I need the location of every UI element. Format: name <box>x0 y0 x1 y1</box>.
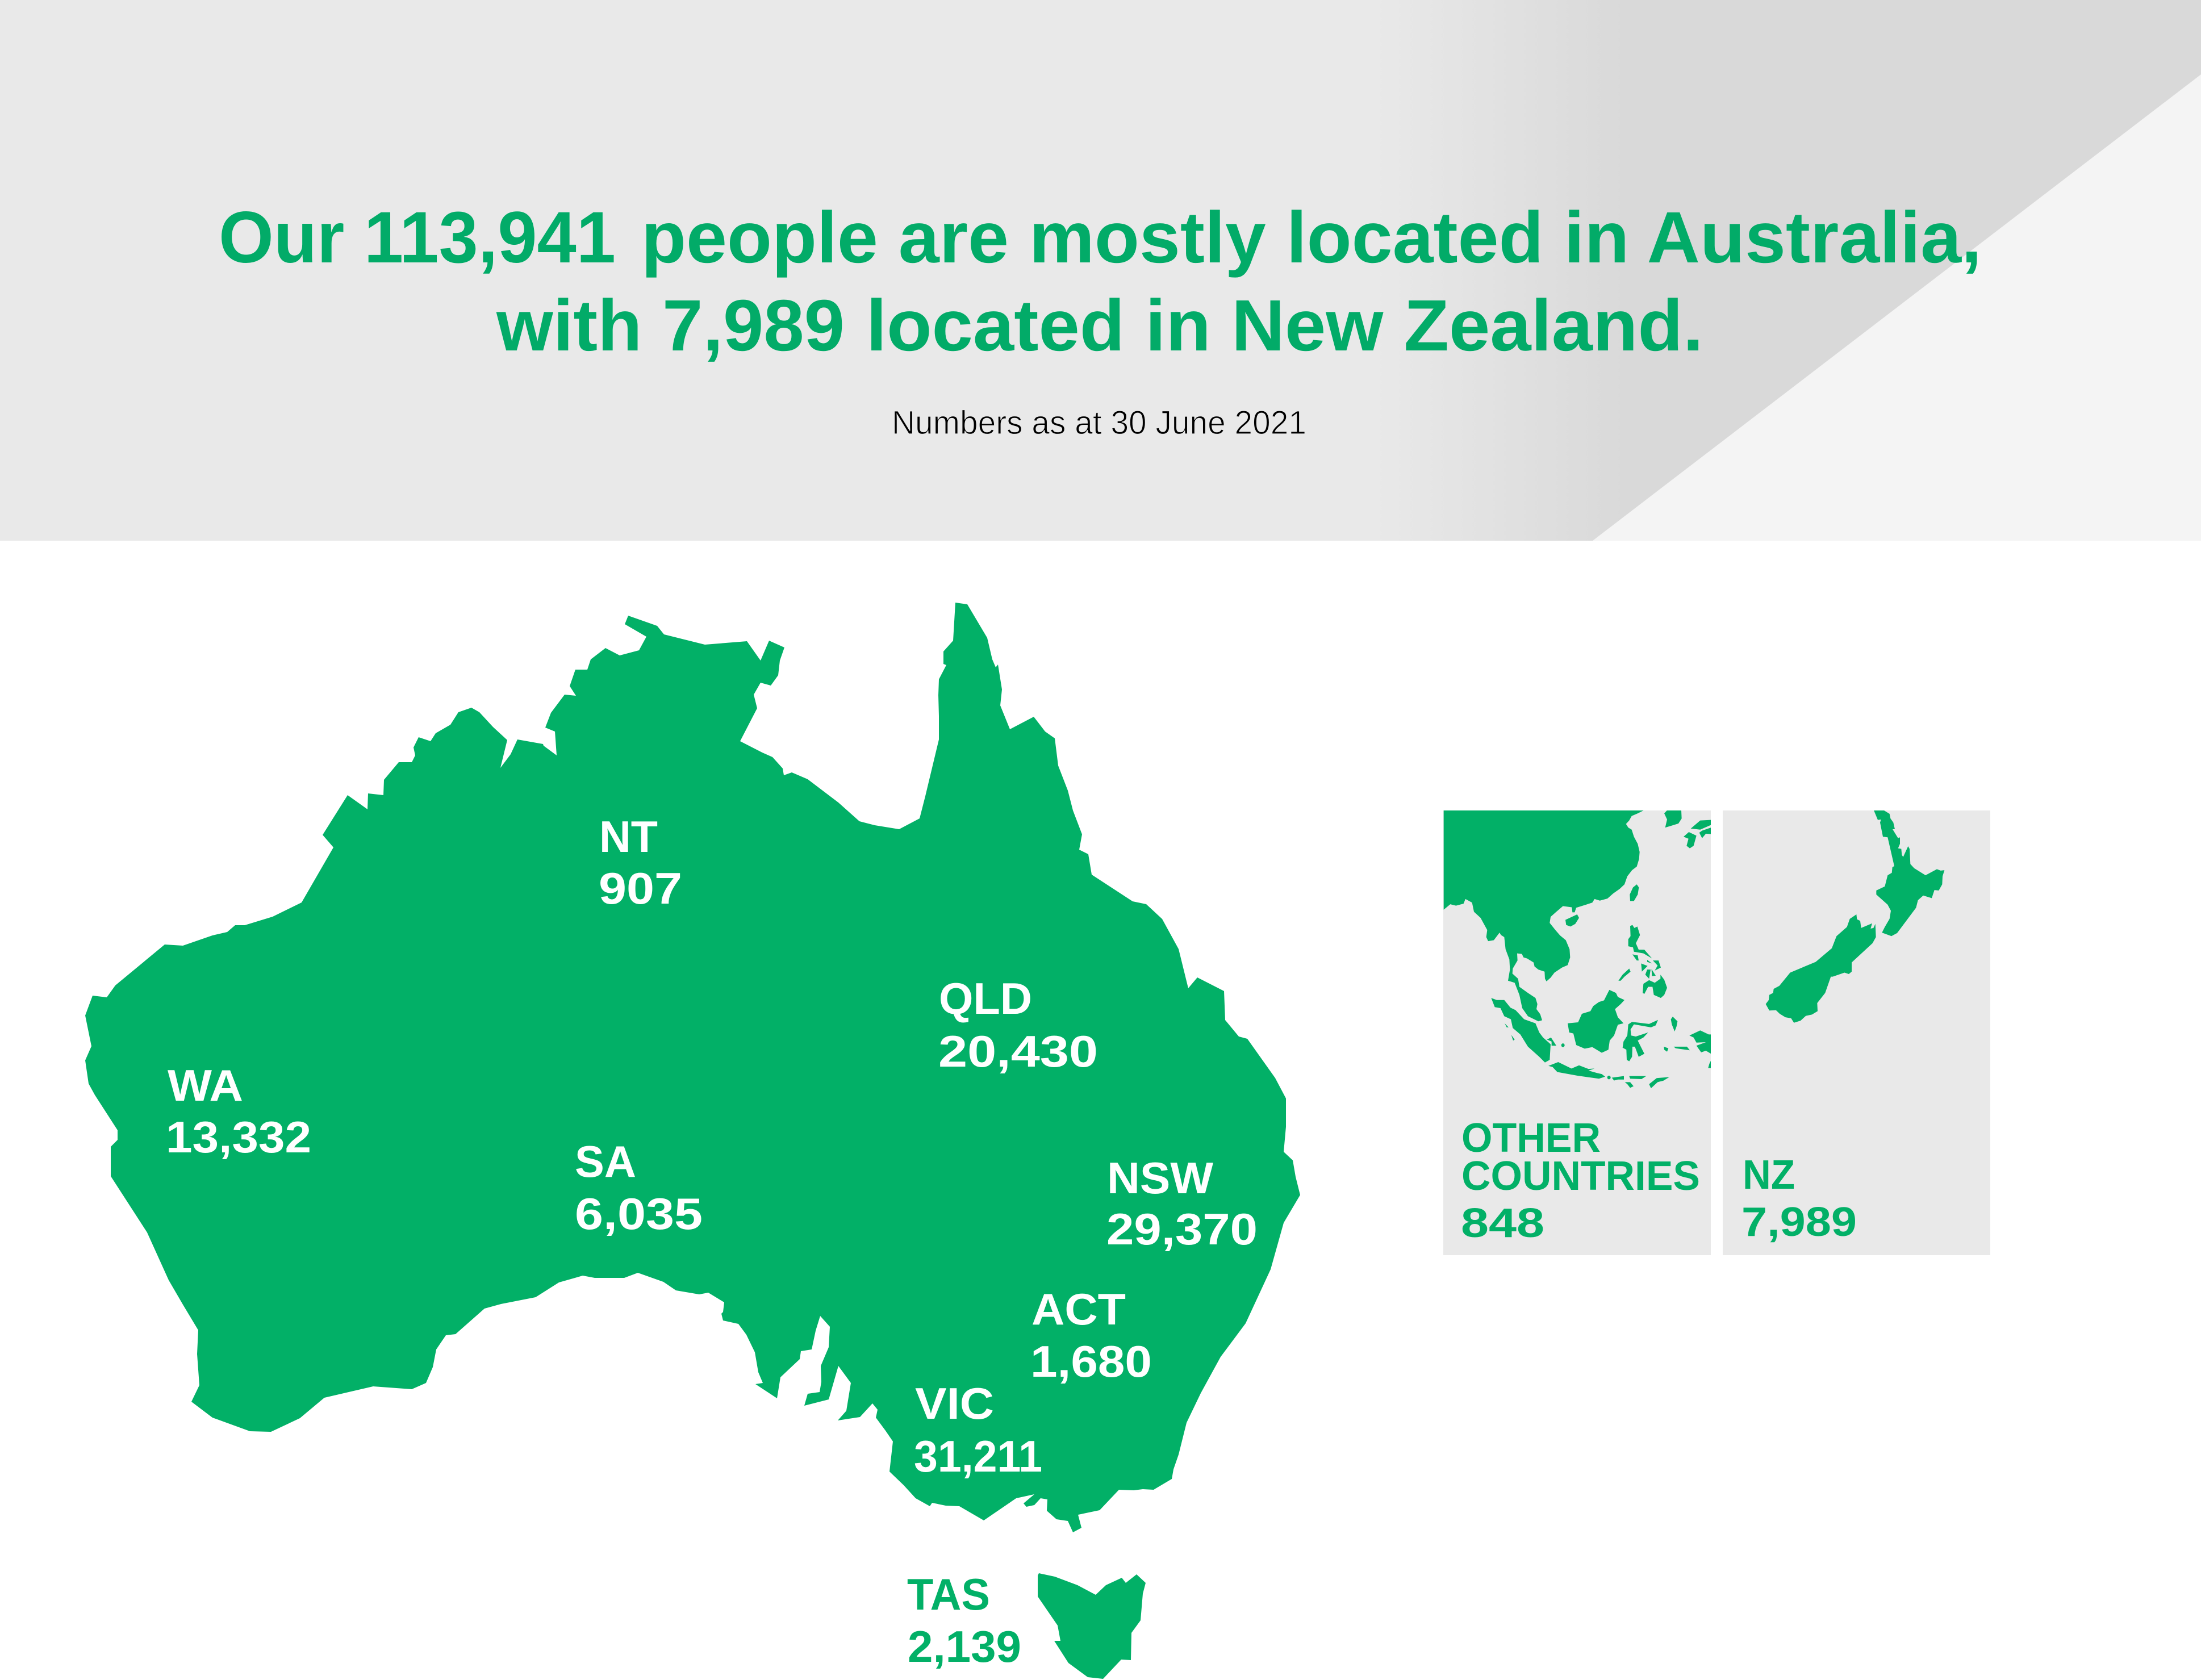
label: other countries <box>1461 1115 1700 1246</box>
panel: other countries <box>1443 810 1711 1255</box>
label: ACT <box>1030 1284 1152 1386</box>
label: WA <box>166 1060 311 1162</box>
title <box>219 197 1982 366</box>
label: SA <box>575 1136 703 1239</box>
label: NZ: 7,989 <box>1741 1200 1857 1245</box>
label: TAS: TAS <box>907 1569 990 1619</box>
label: TAS <box>907 1569 1021 1671</box>
label: VIC: VIC <box>915 1378 994 1428</box>
title: people are mostly located in Australia, <box>641 197 1982 278</box>
mainland Australia <box>85 603 1300 1532</box>
label: WA: 13,332 <box>166 1112 311 1162</box>
map of South-East Asia <box>1444 810 1711 1088</box>
label: NSW: 29,370 <box>1106 1204 1258 1254</box>
label: other countries: COUNTRIES <box>1461 1154 1700 1199</box>
label: NT <box>599 812 682 913</box>
label: SA: SA <box>575 1136 636 1186</box>
title: Our 113,941 <box>219 197 616 278</box>
label: TAS: 2,139 <box>908 1622 1021 1671</box>
header band <box>0 0 2201 541</box>
title: with 7,989 <box>496 285 845 366</box>
label: NSW: NSW <box>1107 1153 1213 1203</box>
subtitle: date note: Numbers as at 30 June 2021 <box>892 404 1306 441</box>
title: located in New Zealand. <box>866 285 1703 366</box>
label: VIC: 31,211 <box>914 1431 1042 1481</box>
label: other countries: OTHER <box>1461 1115 1601 1161</box>
label: WA: WA <box>168 1060 243 1110</box>
label: SA: 6,035 <box>575 1189 703 1239</box>
label: NZ <box>1741 1152 1857 1245</box>
label: ACT: 1,680 <box>1030 1336 1152 1386</box>
panel: New Zealand <box>1723 810 1990 1255</box>
label: QLD: QLD <box>939 973 1032 1023</box>
label: NT: NT <box>599 812 658 862</box>
label: ACT: ACT <box>1031 1284 1126 1334</box>
label: other countries: 848 <box>1461 1201 1544 1246</box>
label: QLD: 20,430 <box>938 1026 1098 1076</box>
label: VIC <box>914 1378 1042 1481</box>
map of New Zealand <box>1766 810 1944 1023</box>
label: QLD <box>938 973 1098 1076</box>
label: NZ: NZ <box>1743 1152 1795 1198</box>
map of Australia <box>85 603 1300 1679</box>
Tasmania <box>1038 1573 1146 1679</box>
label: NT: 907 <box>599 863 682 913</box>
label: NSW <box>1106 1153 1258 1254</box>
